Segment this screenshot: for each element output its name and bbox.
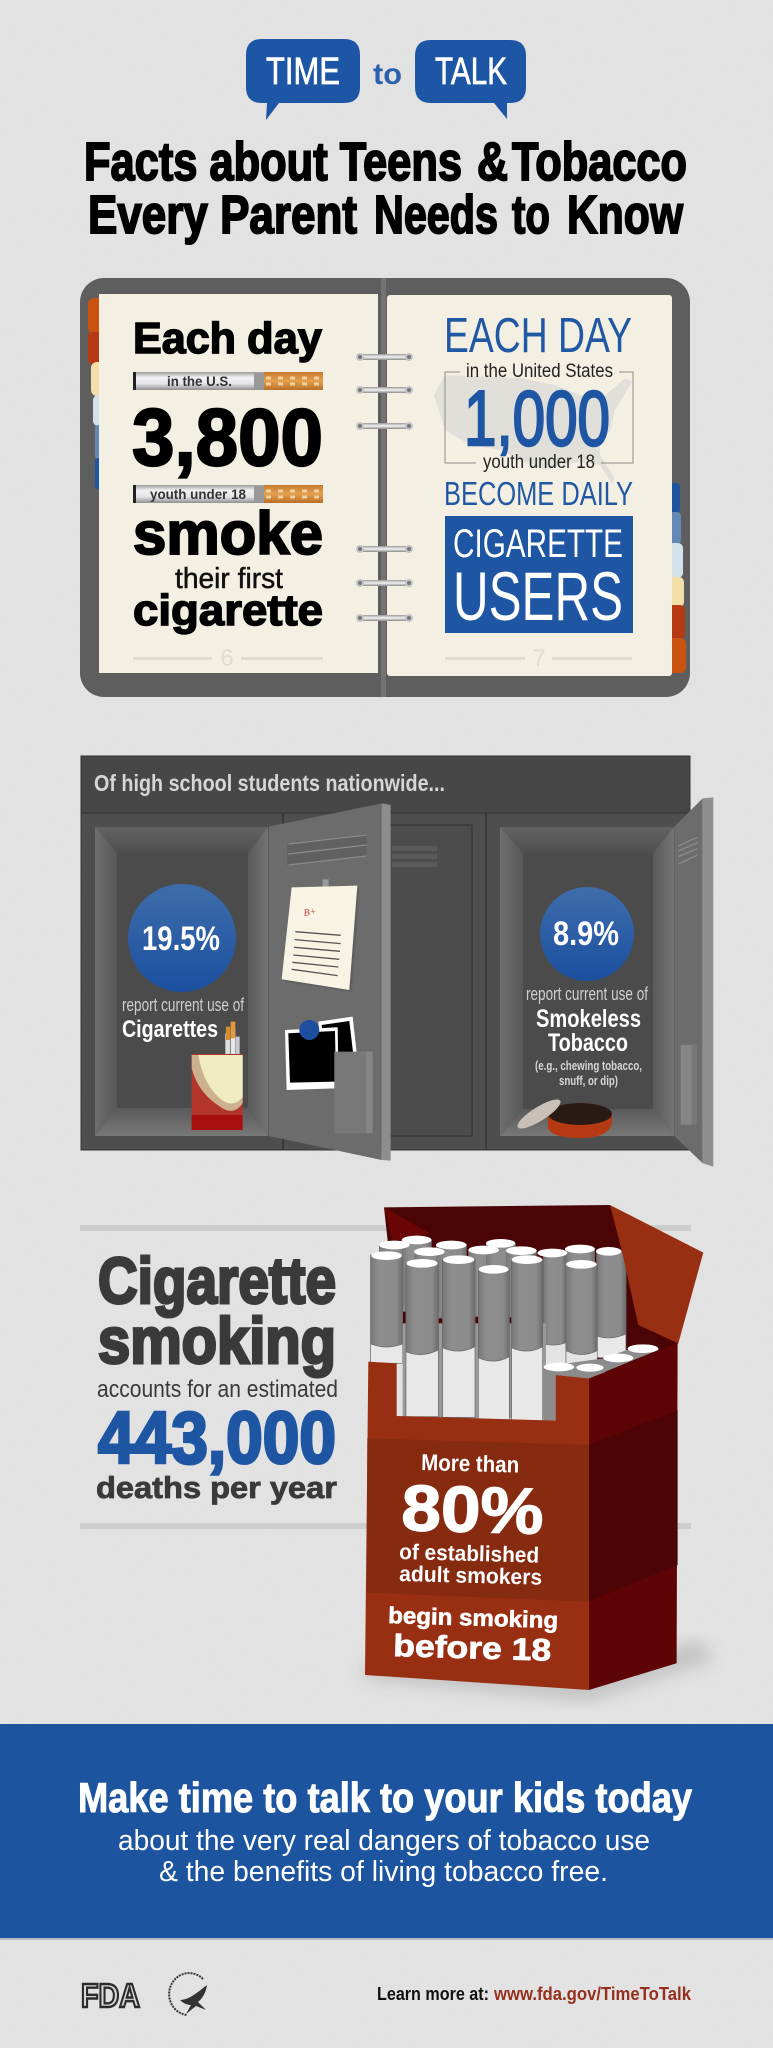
statistic: 19.5% [128,884,236,992]
illustration: open cigarette pack [365,1205,715,1702]
page number 7: 7 [532,645,546,672]
footer [81,1973,692,2015]
page number 6: 6 [220,645,234,672]
speech bubble: TALK [415,40,526,119]
word: cigarette: cigarette [133,586,323,635]
statistic: 8.9% [540,887,634,981]
text: report current use of smokeless tobacco: (e.g., chewing tobacco, [535,1058,642,1073]
text: deaths per year: deaths per year [96,1470,337,1505]
text: in the United States: in the United States [466,361,613,382]
speech bubble: TALK: TALK [435,51,507,93]
heading: cigarette smoking [98,1244,336,1377]
cigarette label: in the U.S. [133,372,323,390]
title: Know [567,185,684,245]
pack text: begin smoking before 18: before 18 [393,1628,552,1668]
speech bubble: TIME [246,39,360,120]
text: dangers and benefits [118,1825,650,1888]
panel: school lockers [81,756,713,1167]
text: report current use of smokeless tobacco: snuff, or dip) [559,1073,618,1088]
closed middle locker door [300,825,472,1136]
text: youth under 18: youth under 18 [483,452,595,473]
text: report current use of smokeless tobacco [526,984,649,1088]
text: report current use of smokeless tobacco: report current use of [526,984,649,1004]
text: report current use of smokeless tobacco: Smokeless [536,1005,641,1033]
pack front face [365,1362,589,1690]
call to action band [0,1724,773,1940]
pack text: more than 80% of established adult smokers: More than [421,1449,520,1478]
text: dangers and benefits: & the benefits of living tobacco free. [159,1856,608,1888]
number: 1,000: 1,000 [464,374,610,462]
cigarette label: youth under 18 [133,485,323,503]
title: Tobacco [512,132,687,192]
text: their first: their first [175,563,283,595]
heading: EACH DAY: EACH DAY [444,309,632,363]
title: Needs [374,185,498,245]
title: Facts about Teens [84,132,462,192]
back row cigarettes [379,1236,595,1318]
right locker interior [500,827,674,1136]
right page [387,295,672,676]
statistic: 19.5%: 19.5% [142,920,220,958]
title: & [477,132,508,192]
heading: Each day: Each [133,314,236,363]
front row cigarettes [371,1251,626,1421]
logo: FDA: FDA [81,1977,140,2014]
text: BECOME DAILY: BECOME DAILY [444,475,633,512]
door handle plate [334,1052,373,1133]
header bar: Of high school students nationwide... [94,770,445,796]
bracket frame [445,372,633,463]
text: report current use of cigarettes: Cigarettes [122,1016,218,1043]
text: learn more link: www.fda.gov/TimeToTalk [493,1984,692,2004]
text: report current use of smokeless tobacco: Tobacco [548,1029,628,1057]
page number 7 [445,645,632,672]
left page [99,294,378,673]
panel: cigarette smoking deaths statistic [96,1244,338,1505]
statistic: 8.9%: 8.9% [553,915,619,953]
number: 443,000: 443,000 [98,1398,336,1479]
logo: HHS seal [169,1973,207,2015]
US map watermark [434,375,632,484]
word: smoke: smoke [133,500,323,567]
heading: Each day: day [247,314,323,363]
locker dividers [283,813,486,1150]
number: 3,800: 3,800 [132,393,323,483]
pack text: more than 80% of established adult smokers [399,1449,544,1590]
title [84,132,687,245]
pack text: begin smoking before 18 [388,1602,559,1668]
door vents [287,834,367,866]
book cover [80,278,690,697]
callout: cigarette users: CIGARETTE [453,522,623,566]
left locker interior [95,827,268,1136]
cigarette label: youth under 18: youth under 18 [150,486,246,502]
pack text: begin smoking before 18: begin smoking [388,1602,559,1633]
title: Every Parent [88,185,357,245]
icon: snuff tin [514,1095,612,1138]
pack text: more than 80% of established adult smokers: adult smokers [399,1561,542,1590]
callout: cigarette users: USERS [453,558,623,635]
icon: small cigarette pack [192,1022,243,1130]
cigarette label: in the U.S.: in the U.S. [167,373,232,389]
photos with pin [285,1017,359,1090]
header bar [81,756,690,813]
logo: Time to Talk speech bubbles [246,39,526,120]
title: to [512,185,550,245]
word: to: to [373,58,402,91]
pack text: more than 80% of established adult smokers: 80% [401,1471,544,1548]
left index tabs [88,298,105,489]
graded paper: B+ [303,906,317,919]
callout: cigarette users [445,516,633,635]
pack lid inside [384,1205,678,1377]
pack lid flap [610,1205,703,1343]
pack shadow [365,1640,715,1702]
text: accounts for an estimated: accounts for an estimated [97,1376,338,1403]
heading: cigarette smoking: smoking [98,1304,336,1377]
heading: Each day [133,314,323,363]
book spine [381,278,386,697]
text: dangers and benefits: about the very real dangers of tobacco use [118,1825,650,1857]
heading: cigarette smoking: Cigarette [98,1244,336,1317]
open right locker door [674,797,713,1167]
text: report current use of cigarettes: report current use of [122,995,245,1015]
page number 6 [133,645,323,672]
panel: open planner book [80,278,690,697]
right index tabs [668,483,686,673]
heading: make time to talk: Make time to talk to your kids today [78,1774,693,1821]
open left locker door [269,803,391,1161]
section rules [80,1225,691,1529]
locker bank [81,813,690,1150]
right low cigarettes in pack [543,1344,660,1421]
text: learn more link: Learn more at: [377,1984,489,2004]
text: report current use of cigarettes [122,995,245,1043]
pack text: more than 80% of established adult smokers: of established [399,1539,539,1568]
binder rings [356,353,413,622]
pack right side [589,1343,678,1690]
graded paper [282,879,359,992]
speech bubble: TIME: TIME [266,51,340,93]
text: learn more link [377,1984,692,2004]
